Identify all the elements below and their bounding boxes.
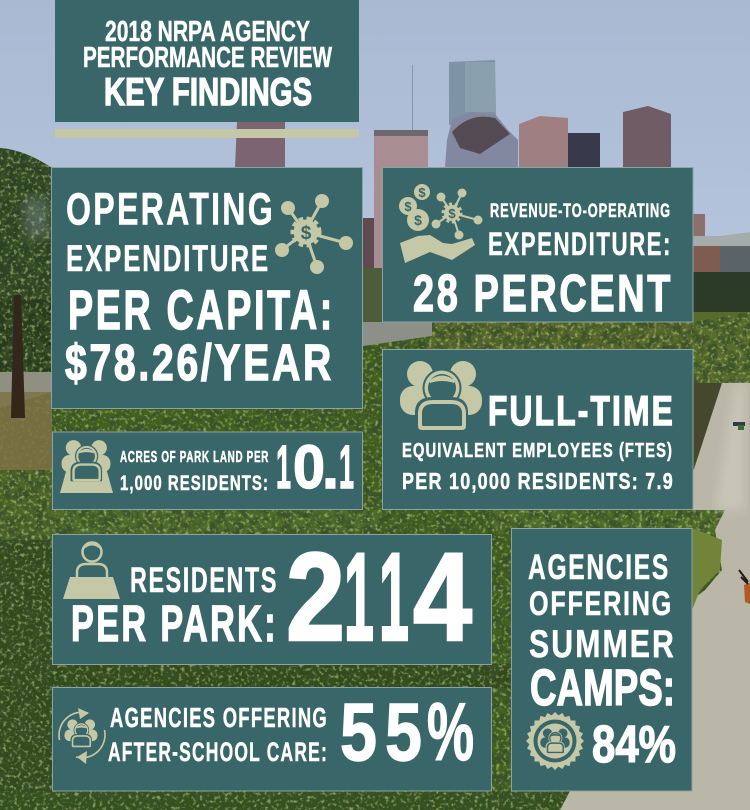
text: per park: PER PARK: <box>71 595 278 652</box>
icon: people at table <box>60 440 113 493</box>
icon: hand with coins and gear: $ <box>404 199 412 214</box>
number: 2114: 1 <box>379 528 409 667</box>
text: residents: RESIDENTS <box>130 561 278 600</box>
number: 55 percent: 5 <box>385 687 422 778</box>
text: offering: OFFERING <box>529 585 673 623</box>
icon: gear network with dollar <box>275 194 353 274</box>
heading: title line 2: PERFORMANCE REVIEW <box>83 42 332 74</box>
text: operating: OPERATING <box>66 184 275 234</box>
panel: acres of park land: 1 <box>339 433 354 501</box>
number: 55 percent: 5 <box>340 687 377 778</box>
number: 10.1: 0 <box>293 433 325 501</box>
number: 10.1: 1 <box>276 433 291 501</box>
number: 55 percent <box>340 687 474 778</box>
text: per capita: PER CAPITA: <box>68 278 335 341</box>
panel: full-time equivalent employees <box>382 350 693 510</box>
title accent bar <box>55 129 359 138</box>
text: acres of park land: ACRES OF PARK LAND PER <box>120 449 269 466</box>
panel: operating expenditure <box>52 168 362 408</box>
text: agencies: AGENCIES <box>528 548 670 587</box>
text: camps: CAMPS: <box>530 659 675 716</box>
heading: title line 1: 2018 NRPA AGENCY <box>105 16 310 48</box>
text: per 10,000 residents: PER 10,000 RESIDENTS: 7.9 <box>402 468 674 494</box>
icon: hand with coins and gear <box>399 184 482 263</box>
icon: person at table <box>63 542 120 599</box>
icon: gear network with dollar: $ <box>301 223 312 244</box>
text: after-school care: AFTER-SCHOOL CARE: <box>108 737 328 767</box>
text: 1,000 residents: 1,000 RESIDENTS: <box>120 471 269 495</box>
text: expenditure: EXPENDITURE <box>66 238 270 279</box>
number: 55 percent: % <box>427 687 474 778</box>
panel: revenue-to-operating <box>382 168 693 323</box>
panel: residents per park <box>52 528 492 667</box>
icon: group of people <box>400 361 482 430</box>
text: expenditure: EXPENDITURE: <box>488 226 672 262</box>
number: dollars per year: $78.26/YEAR <box>65 334 334 391</box>
number: 2114: 4 <box>413 528 472 667</box>
heading: key findings: KEY FINDINGS <box>104 71 312 114</box>
panel: acres of park land <box>52 432 362 510</box>
panel: summer camps <box>512 528 692 791</box>
number: 2114 <box>286 528 472 667</box>
icon: hand with coins and gear: $ <box>414 212 422 228</box>
icon: people in circular arrows <box>59 708 105 764</box>
text: agencies offering: AGENCIES OFFERING <box>110 702 328 733</box>
text: summer: SUMMER <box>529 623 676 666</box>
panel: title <box>55 0 359 122</box>
icon: hand with coins and gear: $ <box>448 206 456 221</box>
panel: after-school care <box>52 687 492 791</box>
text: full-time: FULL-TIME <box>488 387 675 434</box>
number: 2114: 1 <box>344 528 374 667</box>
icon: starburst badge with people <box>526 712 584 770</box>
number: 10.1: . <box>322 433 339 501</box>
number: 84 percent: 84% <box>592 716 676 774</box>
number: 2114: 2 <box>286 528 345 667</box>
number: 10.1 <box>276 433 354 501</box>
icon: hand with coins and gear: $ <box>418 185 426 200</box>
